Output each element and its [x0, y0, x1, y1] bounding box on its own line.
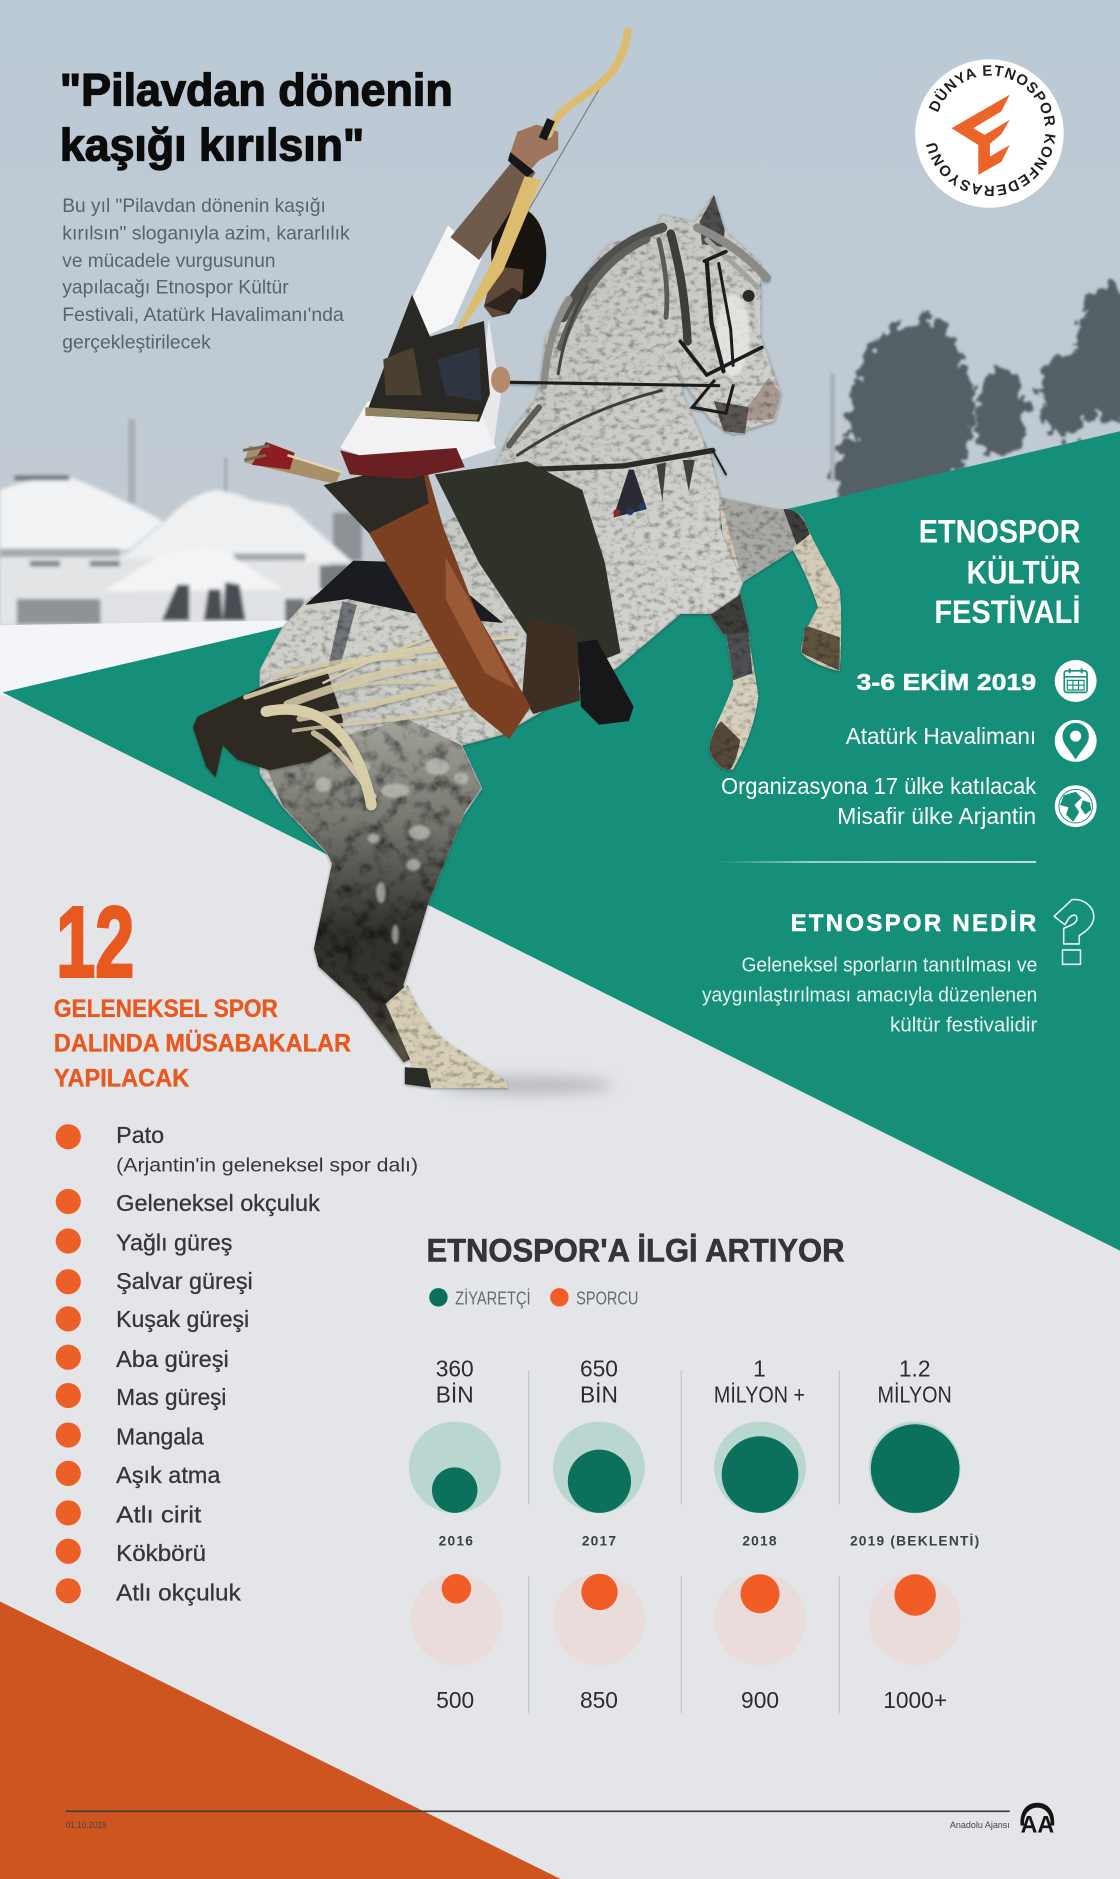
photo background: sky, trees and yurts	[0, 0, 1120, 757]
bullets	[56, 1124, 81, 1603]
labels: Geleneksel okçuluk	[116, 1190, 320, 1216]
rump	[260, 599, 479, 731]
athlete bubble chart	[411, 1574, 961, 1665]
cuff	[508, 152, 534, 177]
what is etnospor description: yaygınlaştırılması amacıyla düzenlenen	[702, 984, 1037, 1006]
festival details: 3-6 EKİM 2019	[856, 669, 1036, 695]
year labels: 2016	[439, 1533, 474, 1548]
year labels	[439, 1532, 980, 1548]
pale cannon and pastern	[386, 985, 508, 1088]
leather chap	[338, 465, 531, 739]
labels: Şalvar güreşi	[116, 1268, 253, 1294]
face and beard	[484, 266, 523, 317]
boot	[522, 617, 580, 714]
orange sub heading: GELENEKSEL SPOR	[54, 995, 278, 1023]
orange sub heading	[54, 995, 351, 1092]
visitor values: BİN	[580, 1382, 618, 1408]
festival heading: KÜLTÜR	[967, 554, 1080, 590]
hand on reins	[491, 367, 510, 393]
intro paragraph: Bu yıl "Pilavdan dönenin kaşığı	[62, 196, 326, 217]
bow upper limb	[549, 31, 628, 134]
bow string	[500, 87, 600, 260]
labels	[116, 1122, 418, 1605]
year labels: 2018	[742, 1533, 778, 1548]
arrows	[243, 442, 341, 484]
cheek highlight	[716, 295, 750, 376]
big number 12: 12	[56, 886, 134, 998]
labels: Mangala	[116, 1424, 204, 1450]
visitor values: 360	[436, 1355, 474, 1381]
visitor bubble chart	[409, 1422, 961, 1513]
labels: Kuşak güreşi	[116, 1306, 249, 1332]
muzzle	[733, 377, 781, 422]
sleeve	[412, 225, 482, 339]
bow grip	[543, 120, 551, 139]
tassel	[613, 470, 647, 517]
body silhouette	[260, 195, 781, 862]
yurts	[0, 476, 362, 625]
intro paragraph: Festivali, Atatürk Havalimanı'nda	[62, 305, 344, 326]
bridle	[503, 252, 762, 474]
festival heading	[919, 514, 1080, 630]
festival details	[721, 669, 1037, 829]
icon: globe	[1055, 785, 1097, 827]
far raised foreleg	[707, 587, 758, 770]
green diagonal panel	[2, 431, 1120, 1251]
visitor values: 650	[580, 1355, 618, 1381]
labels: (Arjantin'in geleneksel spor dalı)	[116, 1155, 418, 1177]
intro paragraph: gerçekleştirilecek	[62, 333, 211, 354]
intro paragraph	[62, 196, 350, 354]
labels: Aşık atma	[116, 1462, 221, 1488]
visitor values: MİLYON	[878, 1382, 952, 1408]
what is etnospor description: Geleneksel sporların tanıtılması ve	[741, 954, 1037, 976]
horse and rider photo cut-out	[193, 31, 841, 1094]
date: 01.10.2019	[66, 1820, 107, 1830]
orange corner triangle	[0, 1602, 561, 1879]
athlete values: 500	[436, 1687, 474, 1713]
labels: Atlı cirit	[116, 1501, 202, 1527]
snow ground	[0, 621, 287, 757]
bow lower limb	[456, 176, 541, 329]
what is etnospor description	[702, 954, 1038, 1036]
ear	[700, 195, 725, 247]
icon: question mark	[1054, 900, 1094, 964]
headline	[60, 64, 453, 171]
what is etnospor heading: ETNOSPOR NEDİR	[791, 910, 1036, 937]
tail	[193, 623, 515, 805]
shirt body	[340, 401, 496, 461]
labels: Yağlı güreş	[116, 1230, 232, 1256]
breast strap tags	[656, 460, 695, 501]
chart column dividers	[529, 1370, 839, 1713]
agency logo: AA	[1021, 1812, 1054, 1839]
headline: "Pilavdan dönenin	[60, 64, 453, 115]
what is etnospor description: kültür festivalidir	[890, 1014, 1038, 1036]
rider	[243, 31, 634, 739]
list of sports	[56, 1122, 418, 1605]
chart legend	[429, 1287, 638, 1308]
divider	[719, 861, 1036, 863]
hoof shadow	[441, 1077, 613, 1094]
visitor values: BİN	[436, 1382, 474, 1408]
labels: Aba güreşi	[116, 1346, 229, 1372]
visitor values: MİLYON +	[714, 1382, 805, 1408]
athlete values: 850	[580, 1687, 618, 1713]
poles	[128, 374, 835, 506]
festival details: Atatürk Havalimanı	[846, 723, 1036, 749]
saddle blanket	[305, 561, 503, 623]
icon: calendar	[1055, 660, 1097, 702]
dapple flecks	[315, 758, 468, 944]
logo: Dünya Etnospor Konfederasyonu: DÜNYA ETNOSPOR KONFEDERASYONU	[926, 65, 1056, 196]
footer rule	[66, 1810, 1010, 1812]
visitor values: 1	[753, 1355, 766, 1381]
intro paragraph: ve mücadele vurgusunun	[62, 251, 276, 272]
labels: Pato	[116, 1122, 164, 1148]
labels: Kökbörü	[116, 1540, 206, 1566]
orange sub heading: YAPILACAK	[54, 1064, 189, 1092]
hind quarter and leg	[266, 719, 482, 1063]
festival details: Organizasyona 17 ülke katılacak	[721, 773, 1037, 799]
mane strands	[509, 228, 767, 446]
festival details: Misafir ülke Arjantin	[837, 803, 1036, 829]
icon: map pin	[1055, 720, 1097, 762]
vest	[365, 295, 490, 422]
trousers	[435, 461, 620, 671]
hand on bow	[510, 125, 558, 174]
sash	[340, 448, 465, 479]
athlete values: 900	[741, 1687, 779, 1713]
intro paragraph: kırılsın" sloganıyla azim, kararlılık	[62, 224, 350, 245]
chart legend: ZİYARETÇİ	[455, 1287, 531, 1308]
orange sub heading: DALINDA MÜSABAKALAR	[54, 1029, 351, 1058]
labels: Atlı okçuluk	[116, 1579, 241, 1605]
agency credit: Anadolu Ajansı	[950, 1820, 1010, 1831]
near raised foreleg	[720, 497, 841, 671]
headline: kaşığı kırılsın"	[60, 120, 364, 171]
chart title: ETNOSPOR'A İLGİ ARTIYOR	[426, 1232, 844, 1268]
festival heading: FESTİVALİ	[934, 594, 1080, 630]
horse	[260, 195, 841, 1088]
stirrup	[577, 640, 634, 725]
rear hoof	[405, 1067, 431, 1088]
fur hat	[491, 208, 546, 299]
year labels: 2017	[582, 1533, 617, 1548]
arm	[450, 158, 535, 260]
trees	[831, 284, 1120, 507]
athlete values	[436, 1687, 947, 1713]
eye	[743, 290, 755, 302]
intro paragraph: yapılacağı Etnospor Kültür	[62, 277, 289, 298]
visitor values: 1.2	[899, 1355, 931, 1381]
visitor values	[436, 1355, 952, 1408]
labels: Mas güreşi	[116, 1384, 226, 1410]
year labels: 2019 (BEKLENTİ)	[850, 1532, 980, 1548]
chart legend: SPORCU	[576, 1287, 638, 1308]
athlete values: 1000+	[883, 1687, 947, 1713]
festival heading: ETNOSPOR	[919, 514, 1080, 550]
